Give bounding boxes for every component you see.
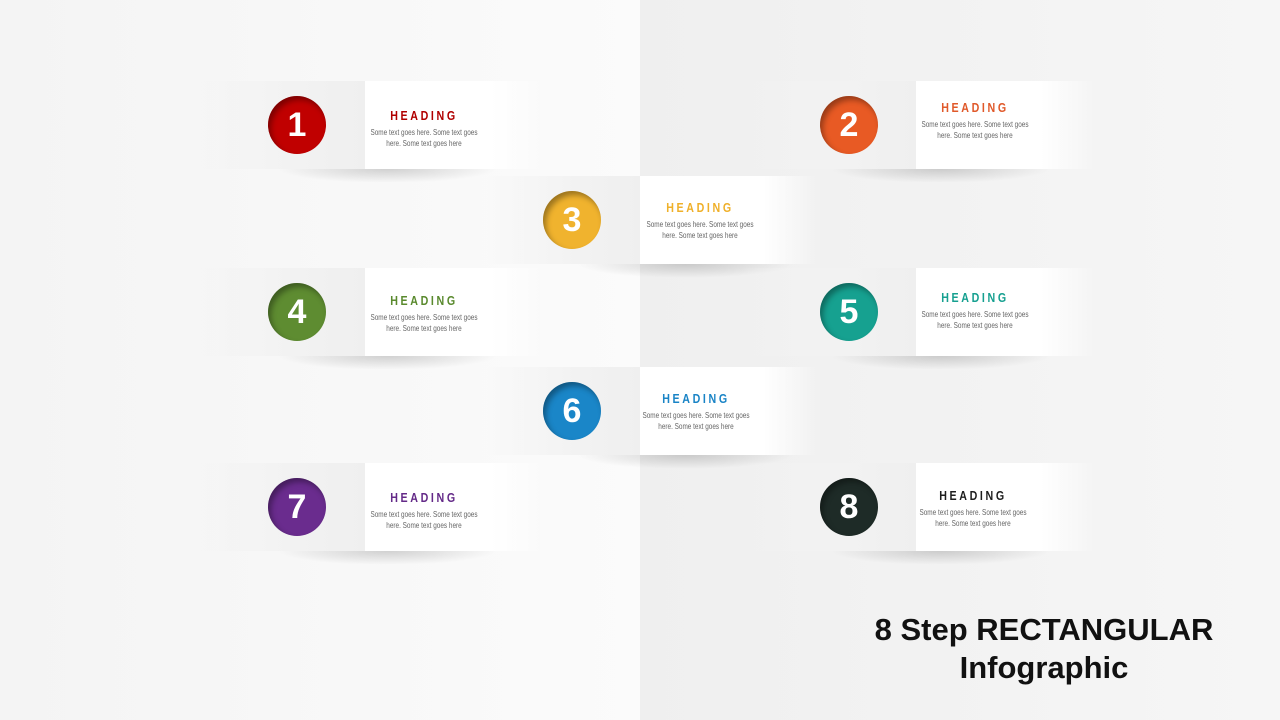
- icon: number 7: 7: [288, 488, 306, 526]
- text: step 4: [370, 293, 478, 333]
- icon: number 5: [820, 283, 878, 341]
- text: step 8: HEADING: [939, 488, 1007, 503]
- text: step 2: Some text goes here. Some text goes: [921, 120, 1029, 129]
- icon: number 8: 8: [840, 488, 858, 526]
- icon: number 6: [543, 382, 601, 440]
- text: step 5: HEADING: [941, 290, 1009, 305]
- text: step 6: here. Some text goes here: [658, 422, 734, 431]
- text: step 2: here. Some text goes here: [937, 131, 1013, 140]
- text: step 7: HEADING: [390, 490, 458, 505]
- text: step 2: HEADING: [941, 100, 1009, 115]
- text: step 7: [370, 490, 478, 530]
- card 5: [820, 268, 1056, 367]
- text: step 1: [370, 108, 478, 148]
- text: step 6: [642, 391, 750, 431]
- icon: number 5: 5: [840, 293, 858, 331]
- text: step 3: here. Some text goes here: [662, 231, 738, 240]
- icon: number 6: 6: [563, 392, 581, 430]
- title: [875, 612, 1213, 685]
- icon: number 8: [820, 478, 878, 536]
- text: step 7: here. Some text goes here: [386, 521, 462, 530]
- text: step 8: here. Some text goes here: [935, 519, 1011, 528]
- text: step 5: [921, 290, 1029, 330]
- icon: number 7: [268, 478, 326, 536]
- title: Infographic: [960, 650, 1128, 685]
- icon: number 4: [268, 283, 326, 341]
- text: step 5: here. Some text goes here: [937, 321, 1013, 330]
- text: step 3: HEADING: [666, 200, 734, 215]
- card 3: [543, 176, 786, 275]
- text: step 3: Some text goes here. Some text goes: [646, 220, 754, 229]
- card 8: [820, 463, 1056, 562]
- text: step 1: here. Some text goes here: [386, 139, 462, 148]
- icon: number 4: 4: [288, 293, 306, 331]
- icon: number 2: [820, 96, 878, 154]
- text: step 4: here. Some text goes here: [386, 324, 462, 333]
- text: step 6: Some text goes here. Some text goes: [642, 411, 750, 420]
- icon: number 2: 2: [840, 106, 858, 144]
- text: step 6: HEADING: [662, 391, 730, 406]
- text: step 3: [646, 200, 754, 240]
- text: step 4: HEADING: [390, 293, 458, 308]
- icon: number 1: 1: [288, 106, 306, 144]
- text: step 1: Some text goes here. Some text goes: [370, 128, 478, 137]
- text: step 7: Some text goes here. Some text goes: [370, 510, 478, 519]
- text: step 4: Some text goes here. Some text goes: [370, 313, 478, 322]
- text: step 8: [919, 488, 1027, 528]
- card 1: [268, 81, 478, 180]
- text: step 2: [921, 100, 1029, 140]
- icon: number 3: 3: [563, 201, 581, 239]
- title: 8 Step RECTANGULAR: [875, 612, 1213, 647]
- card 2: [820, 81, 1056, 180]
- card 6: [543, 367, 786, 466]
- text: step 8: Some text goes here. Some text goes: [919, 508, 1027, 517]
- icon: number 3: [543, 191, 601, 249]
- card 7: [268, 463, 478, 562]
- card 4: [268, 268, 478, 367]
- text: step 5: Some text goes here. Some text goes: [921, 310, 1029, 319]
- icon: number 1: [268, 96, 326, 154]
- text: step 1: HEADING: [390, 108, 458, 123]
